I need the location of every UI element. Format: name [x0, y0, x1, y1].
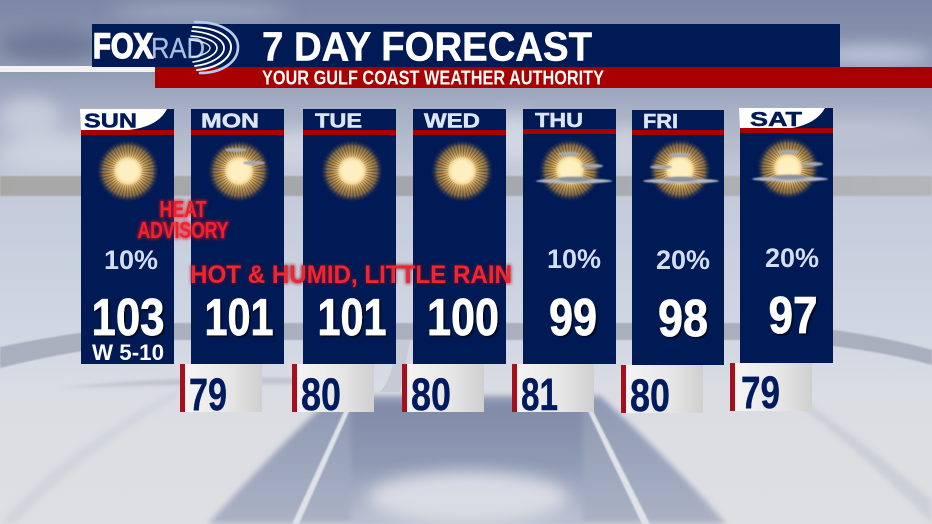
low temperature: Thursday: 81: [521, 369, 558, 420]
callout: heat advisory: ADVISORY: [138, 217, 228, 243]
low temperature: Tuesday: 80: [301, 369, 341, 420]
icon: sun: [96, 139, 160, 203]
precipitation chance: 10%: [547, 244, 601, 274]
callout: heat advisory: [138, 196, 228, 243]
panel: Saturday: [739, 108, 833, 363]
callout: heat advisory: HEAT: [160, 196, 206, 222]
callout: hot and humid: HOT & HUMID, LITTLE RAIN: [190, 261, 512, 289]
high temperature: 101: [204, 289, 274, 347]
icon: partly cloudy: [643, 138, 719, 202]
logo: FOX RAD: FOX: [93, 27, 154, 66]
low temperature: Tuesday: [292, 364, 374, 420]
subtitle: YOUR GULF COAST WEATHER AUTHORITY: [262, 66, 604, 90]
panel: Friday: [632, 110, 724, 365]
day label: SUN: [84, 110, 137, 132]
high temperature: 98: [658, 290, 708, 348]
high temperature: 103: [92, 289, 164, 347]
precipitation chance: 20%: [765, 243, 819, 273]
logo: FOX RAD: RAD: [151, 33, 205, 65]
panel: Wednesday: [413, 109, 506, 364]
day label: THU: [535, 110, 583, 132]
high temperature: 97: [768, 287, 818, 345]
panel: Monday: [191, 109, 284, 364]
low temperature: Wednesday: [402, 364, 484, 420]
low temperature: Friday: [621, 365, 703, 421]
panel: Tuesday: [303, 109, 396, 364]
icon: mostly sunny: [207, 139, 271, 203]
low temperature: Saturday: 79: [741, 367, 780, 418]
precipitation chance: 20%: [656, 245, 710, 275]
callout: heat advisory: HEAT: [160, 196, 206, 222]
high temperature: 99: [549, 289, 597, 347]
callout: hot and humid: HOT & HUMID, LITTLE RAIN: [190, 261, 512, 289]
header: title bar: [92, 24, 840, 70]
day label: TUE: [315, 110, 362, 132]
low temperature: Monday: 79: [189, 369, 227, 420]
low temperature: Monday: [180, 364, 262, 420]
high temperature: 100: [427, 289, 499, 347]
header: red subtitle bar: [155, 66, 932, 90]
low temperature: Thursday: [512, 364, 594, 420]
day label: FRI: [643, 111, 678, 133]
panel: Sunday: [80, 109, 174, 365]
low temperature: Saturday: [730, 363, 812, 418]
day label: SAT: [750, 109, 802, 131]
icon: partly cloudy: [536, 138, 612, 202]
day label: MON: [201, 110, 259, 132]
title: 7 DAY FORECAST: [262, 24, 592, 70]
logo: FOX RAD: [93, 22, 238, 73]
day label: WED: [424, 110, 480, 132]
low temperature: Wednesday: 80: [411, 369, 451, 420]
high temperature: 101: [318, 289, 386, 347]
icon: sun: [320, 139, 384, 203]
wind: W 5-10: [92, 340, 164, 365]
white rule at left of header: [0, 66, 156, 72]
icon: partly cloudy: [752, 136, 828, 200]
panel: Thursday: [523, 109, 616, 364]
icon: sun: [430, 139, 494, 203]
precipitation chance: 10%: [104, 245, 158, 275]
callout: heat advisory: ADVISORY: [138, 217, 228, 243]
low temperature: Friday: 80: [630, 370, 670, 421]
